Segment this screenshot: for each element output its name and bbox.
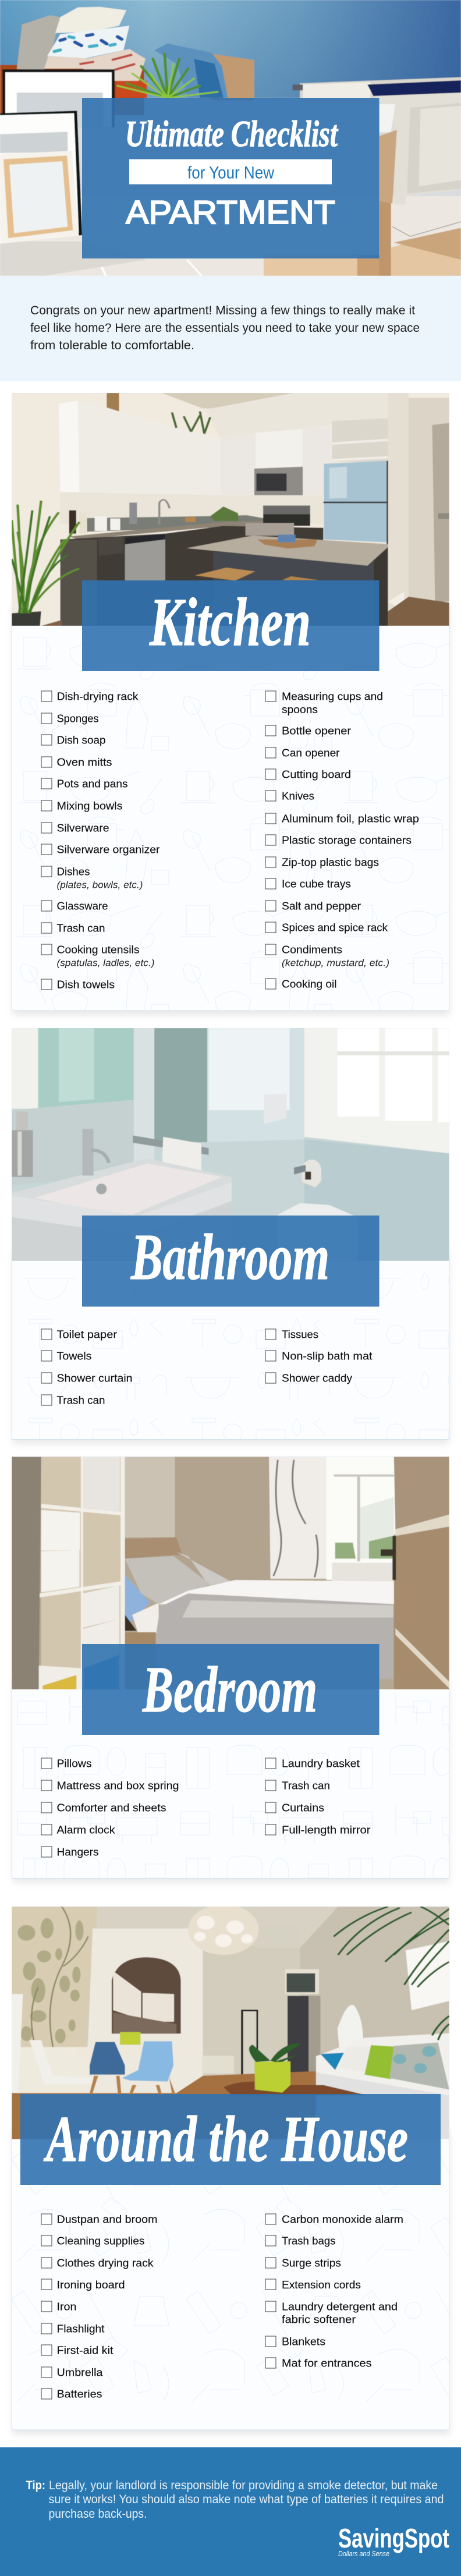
- item: Full-length mirror: [282, 1824, 371, 1836]
- item: Dish towels: [57, 979, 115, 991]
- item: Condiments: [282, 944, 342, 956]
- item: [265, 791, 314, 802]
- item: Umbrella: [57, 2367, 104, 2379]
- item: Can opener: [282, 747, 340, 759]
- item: Pots and pans: [57, 778, 128, 789]
- header photo: moving boxes, pillows and frames: [0, 0, 461, 276]
- item: (spatulas, ladles, etc.): [57, 957, 155, 969]
- item: Towels: [57, 1351, 92, 1362]
- item: Zip-top plastic bags: [282, 857, 379, 869]
- item: spoons: [282, 704, 318, 715]
- item: [41, 944, 155, 969]
- item: Trash can: [57, 922, 105, 934]
- item: [265, 1802, 324, 1814]
- checklist: around the house column 2: [265, 2213, 403, 2369]
- intro panel: from tolerable to comfortable.: [30, 338, 194, 352]
- item: Glassware: [57, 900, 108, 912]
- item: Silverware: [57, 822, 109, 834]
- item: Comforter and sheets: [57, 1802, 166, 1814]
- item: Plastic storage containers: [282, 835, 412, 846]
- item: Ice cube trays: [282, 878, 351, 890]
- item: Oven mitts: [57, 757, 112, 768]
- item: (plates, bowls, etc.): [57, 879, 143, 891]
- item: Ironing board: [57, 2279, 125, 2291]
- checklist: bathroom column 2: [265, 1328, 373, 1384]
- item: Mattress and box spring: [57, 1780, 179, 1792]
- item: Curtains: [282, 1802, 324, 1814]
- item: Dish-drying rack: [57, 690, 139, 702]
- checklist: bathroom column 1: [41, 1328, 133, 1406]
- item: Knives: [282, 791, 314, 802]
- subtitle bar: for Your New: [187, 163, 274, 183]
- intro panel: [0, 276, 461, 381]
- item: Hangers: [57, 1847, 99, 1858]
- item: Spices and spice rack: [282, 922, 388, 934]
- item: Extension cords: [282, 2279, 361, 2291]
- item: [265, 2301, 398, 2325]
- item: [41, 2367, 104, 2379]
- banner: Kitchen: Kitchen: [149, 584, 311, 660]
- panel: kitchen: [12, 393, 449, 1015]
- checklist: kitchen column 1: [41, 690, 159, 991]
- item: Blankets: [282, 2336, 325, 2347]
- panel: bathroom: [12, 1028, 449, 1444]
- item: Silverware organizer: [57, 844, 159, 856]
- item: Trash can: [282, 1780, 330, 1792]
- item: Batteries: [57, 2388, 102, 2400]
- item: Measuring cups and: [282, 690, 383, 702]
- item: Cleaning supplies: [57, 2235, 144, 2247]
- item: Non-slip bath mat: [282, 1351, 373, 1362]
- banner: Bedroom: [82, 1644, 380, 1735]
- checklist: bedroom column 2: [265, 1758, 371, 1836]
- item: fabric softener: [282, 2313, 356, 2325]
- item: [41, 1758, 92, 1770]
- tip text: Tip:: [26, 2479, 45, 2492]
- intro panel: Congrats on your new apartment! Missing a few things to really make it: [30, 303, 415, 317]
- item: Trash can: [57, 1395, 105, 1406]
- subtitle bar: [129, 160, 332, 184]
- banner: Kitchen: [82, 580, 380, 671]
- item: Flashlight: [57, 2323, 105, 2334]
- item: [265, 1328, 318, 1340]
- header banner: [82, 98, 380, 258]
- tip text: purchase back-ups.: [49, 2507, 147, 2521]
- banner: Bathroom: [82, 1216, 380, 1306]
- item: [265, 690, 383, 715]
- item: [41, 1847, 99, 1858]
- photo: kitchen: [12, 393, 449, 626]
- item: Cutting board: [282, 768, 351, 780]
- item: Tissues: [282, 1328, 318, 1340]
- item: (ketchup, mustard, etc.): [282, 957, 389, 969]
- item: Carbon monoxide alarm: [282, 2213, 403, 2225]
- intro panel: feel like home? Here are the essentials you need to take your new space: [30, 321, 420, 335]
- banner: Bathroom: Bathroom: [130, 1221, 329, 1294]
- footer panel: [0, 2447, 461, 2576]
- item: [41, 2388, 102, 2400]
- tip text: Legally, your landlord is responsible for providing a smoke detector, but make: [49, 2479, 438, 2492]
- tip text: sure it works! You should also make note what type of batteries it requires and: [49, 2493, 444, 2506]
- photo: bedroom: [12, 1457, 449, 1689]
- item: Clothes drying rack: [57, 2258, 154, 2269]
- item: Iron: [57, 2301, 77, 2312]
- item: Cooking utensils: [57, 944, 140, 956]
- logo: SavingSpot: Dollars and Sense: [338, 2549, 389, 2558]
- item: [265, 2336, 325, 2347]
- title: Apartment: APARTMENT: [126, 194, 335, 231]
- panel: around the house: [12, 1904, 449, 2435]
- checklist: kitchen column 2: [265, 690, 419, 990]
- checklist: bedroom column 1: [41, 1758, 179, 1858]
- item: Shower caddy: [282, 1373, 352, 1384]
- item: Bottle opener: [282, 725, 351, 737]
- item: Salt and pepper: [282, 900, 361, 912]
- item: Surge strips: [282, 2258, 341, 2269]
- item: Sponges: [57, 713, 99, 724]
- checklist: around the house column 1: [41, 2213, 157, 2400]
- title: Ultimate Checklist: Ultimate Checklist: [125, 113, 339, 154]
- item: Dish soap: [57, 735, 106, 746]
- item: Alarm clock: [57, 1824, 116, 1836]
- item: Mat for entrances: [282, 2358, 371, 2369]
- item: Dishes: [57, 866, 90, 878]
- panel: bedroom: [12, 1457, 449, 1883]
- item: Mixing bowls: [57, 800, 122, 812]
- item: Trash bags: [282, 2235, 335, 2247]
- item: [41, 866, 143, 891]
- item: Pillows: [57, 1758, 92, 1770]
- item: Cooking oil: [282, 978, 336, 990]
- item: First-aid kit: [57, 2345, 113, 2357]
- tip text: [26, 2479, 444, 2521]
- item: Toilet paper: [57, 1328, 117, 1340]
- item: [41, 1351, 92, 1362]
- photo: living room: [12, 1904, 449, 2139]
- item: Dustpan and broom: [57, 2213, 157, 2225]
- item: [265, 944, 389, 969]
- item: [41, 2301, 77, 2312]
- item: Laundry detergent and: [282, 2301, 398, 2312]
- banner: Bedroom: Bedroom: [142, 1654, 317, 1726]
- item: Aluminum foil, plastic wrap: [282, 813, 419, 824]
- item: Laundry basket: [282, 1758, 360, 1770]
- photo: bathroom: [12, 1028, 449, 1261]
- item: Shower curtain: [57, 1373, 133, 1384]
